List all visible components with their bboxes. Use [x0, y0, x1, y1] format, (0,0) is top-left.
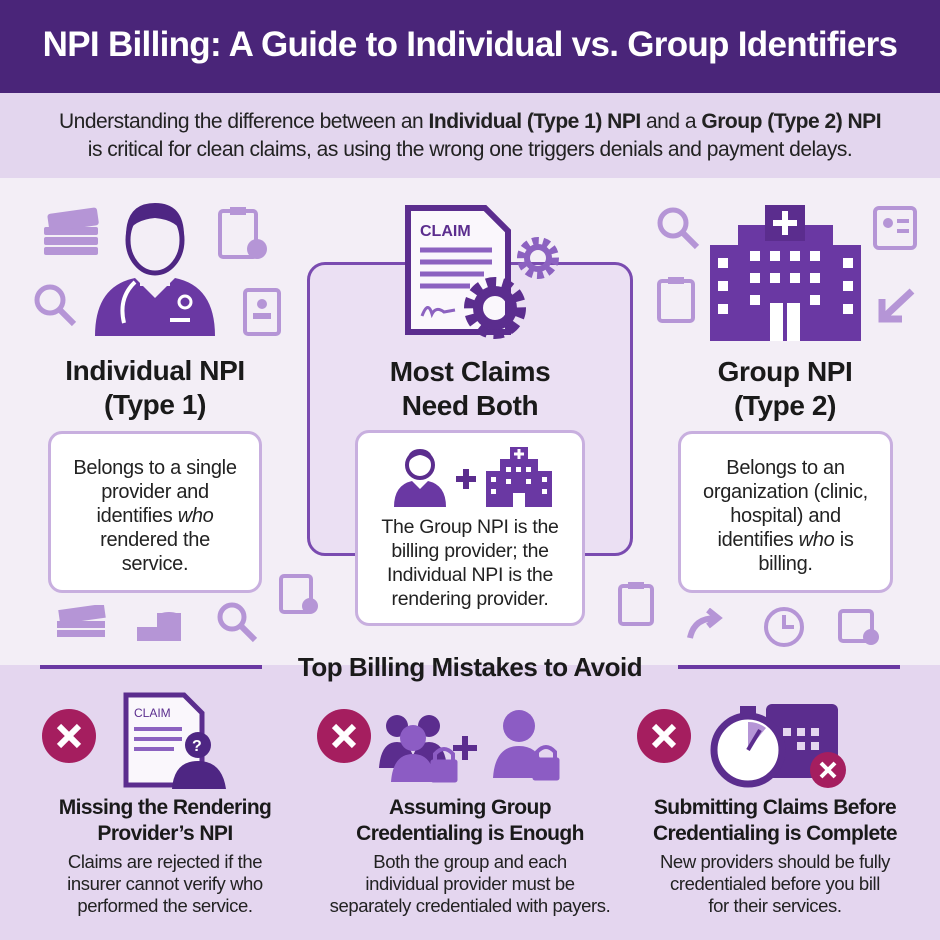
heading: group: Group NPI: [718, 356, 852, 387]
icon: clipboard: [218, 207, 267, 259]
box: group: Belongs to an: [726, 457, 845, 479]
heading: both: Need Both: [402, 390, 538, 421]
icon: x: [637, 709, 691, 763]
icon: stopwatch calendar: [710, 704, 846, 788]
box: individual: identifies who: [96, 505, 214, 527]
icon: magnifier right: [658, 208, 699, 249]
mistake 3: [637, 704, 897, 916]
mistake 1: Claims are rejected if the: [68, 851, 262, 872]
box: individual: [48, 431, 262, 593]
subtitle text: is critical for clean claims, as using the wrong one triggers denials and payment delays.: [88, 138, 852, 161]
icon: doctor: [95, 203, 215, 336]
mistake 3: credentialed before you bill: [670, 873, 880, 894]
icon: id card: [243, 288, 281, 336]
mistake 2: Both the group and each: [373, 851, 567, 872]
heading: group: [718, 356, 852, 421]
box: individual: Belongs to a single: [73, 457, 237, 479]
mistake 2: individual provider must be: [365, 873, 575, 894]
box: individual: service.: [122, 553, 188, 575]
icon: x: [42, 709, 96, 763]
box: group: billing.: [758, 553, 813, 575]
box: both: billing provider; the: [391, 540, 549, 562]
icon: money: [44, 208, 99, 255]
heading: group: (Type 2): [734, 390, 836, 421]
subtitle text: Understanding the difference between an Individual (Type 1) NPI and a Group (Type 2) NPI: [59, 110, 881, 133]
box: group: [678, 431, 893, 593]
mistake 2: Assuming Group: [389, 796, 551, 819]
box: both: The Group NPI is the: [381, 516, 559, 538]
icon: magnifier: [34, 284, 76, 326]
mistake 3: Submitting Claims Before: [654, 796, 896, 819]
mistake 2: Credentialing is Enough: [356, 822, 584, 845]
mistake 3: for their services.: [708, 895, 842, 916]
heading: both: [390, 356, 550, 421]
title bar: [0, 0, 940, 93]
decorative icons bottom row: [57, 574, 879, 647]
mistake 2: [317, 709, 610, 916]
mistake 2: separately credentialed with payers.: [330, 895, 610, 916]
icon: claim with person: ?: [192, 738, 202, 755]
icon: id card right: [873, 206, 917, 250]
heading: both: Most Claims: [390, 356, 550, 387]
box: both: Individual NPI is the: [387, 564, 553, 586]
title: NPI Billing: A Guide to Individual vs. Group Identifiers: [43, 25, 897, 64]
subtitle band: [0, 93, 940, 178]
box: individual: provider and: [101, 481, 209, 503]
icon: claim document: [405, 205, 559, 339]
middle frame: [307, 262, 633, 556]
icon: clipboard right: [657, 277, 695, 323]
icon: group plus person with locks: [379, 710, 560, 782]
box: both: [355, 430, 585, 626]
bottom section background: [0, 665, 940, 940]
heading: individual: (Type 1): [104, 389, 206, 420]
box: group: hospital) and: [730, 505, 841, 527]
icon: claim document: CLAIM: [420, 223, 471, 240]
icon: hospital: [710, 205, 861, 341]
icon: arrow check: [878, 288, 914, 322]
icons: doctor plus hospital: [394, 447, 552, 507]
mistake 1: Missing the Rendering: [59, 796, 271, 819]
divider heading: [40, 652, 900, 682]
mistake 1: performed the service.: [77, 895, 253, 916]
icon: claim with person: [124, 692, 226, 789]
box: both: rendering provider.: [392, 588, 548, 610]
mistake 1: insurer cannot verify who: [67, 873, 263, 894]
icon: x: [317, 709, 371, 763]
heading: individual: Individual NPI: [65, 355, 245, 386]
box: group: organization (clinic,: [703, 481, 868, 503]
box: individual: rendered the: [100, 529, 210, 551]
box: group: identifies who is: [717, 529, 854, 551]
mistake 1: Provider’s NPI: [97, 822, 233, 845]
mistake 3: Credentialing is Complete: [653, 822, 897, 845]
mistake 1: [42, 692, 271, 916]
heading: individual: [65, 355, 245, 420]
subtitle text: [59, 110, 881, 161]
divider heading: Top Billing Mistakes to Avoid: [298, 652, 642, 682]
mistake 3: New providers should be fully: [660, 851, 890, 872]
icon: claim with person: CLAIM: [134, 706, 171, 720]
